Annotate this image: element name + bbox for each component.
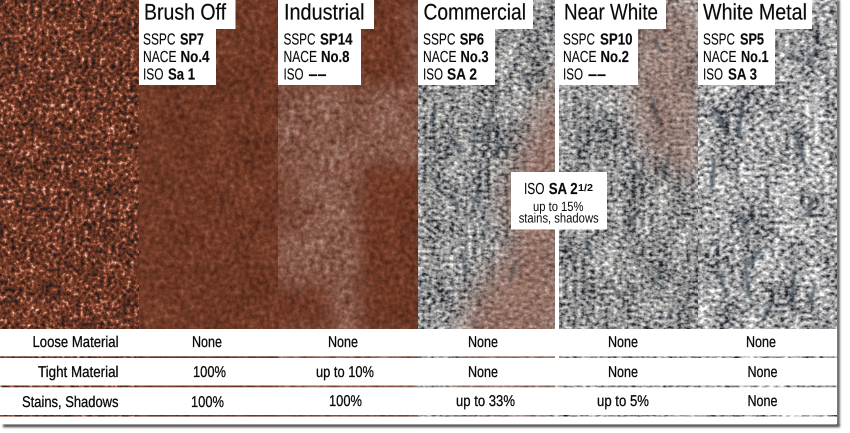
header: White Metal	[698, 0, 812, 85]
row: loose material: None	[192, 334, 222, 351]
row: tight material: up to 10%	[316, 364, 374, 381]
header: White Metal: SP5	[740, 32, 764, 48]
header: White Metal: SSPC	[703, 32, 735, 48]
header: White Metal: No.1	[741, 49, 769, 66]
row: stains, shadows: 100%	[329, 393, 362, 410]
header: Industrial	[278, 0, 374, 85]
row: stains, shadows: up to 33%	[456, 393, 515, 410]
header: White Metal: ISO	[703, 66, 723, 84]
header: White Metal: White Metal	[703, 0, 807, 24]
row: tight material: 100%	[193, 364, 226, 381]
header: Brush Off: SP7	[180, 32, 204, 48]
header: Industrial: ISO	[284, 66, 304, 84]
panel: industrial texture	[278, 0, 418, 417]
panel: commercial texture	[418, 0, 555, 417]
row: stains, shadows: None	[748, 393, 778, 410]
row: loose material: None	[468, 334, 498, 351]
header: Commercial: SP6	[460, 32, 484, 48]
header: Brush Off: NACE	[143, 49, 176, 66]
header: Commercial: SA 2	[447, 66, 477, 84]
header: Brush Off: Brush Off	[144, 0, 227, 24]
gap between commercial and near white	[555, 0, 559, 358]
header: Commercial	[418, 0, 533, 85]
callout: ISO SA 2 1/2: 1/2	[578, 183, 593, 194]
header: Brush Off: Sa 1	[168, 66, 195, 84]
row: tight material: None	[608, 364, 638, 381]
row: loose material	[32, 334, 776, 351]
header: Industrial: SSPC	[284, 32, 316, 48]
row: loose material: None	[746, 334, 776, 351]
callout: ISO SA 2 1/2: SA 2	[549, 181, 578, 198]
panel: white metal texture	[698, 0, 837, 417]
row: stains, shadows: 100%	[191, 394, 224, 411]
callout: ISO SA 2 1/2: stains, shadows	[519, 211, 599, 226]
row: stains, shadows	[22, 393, 778, 411]
header: Near White: SSPC	[563, 32, 595, 48]
callout: ISO SA 2 1/2	[511, 172, 607, 230]
row: tight material: None	[468, 364, 498, 381]
header: Near White: Near White	[564, 0, 658, 24]
header: Commercial: SSPC	[423, 32, 456, 48]
header: Industrial: No.8	[321, 49, 350, 66]
row: stains, shadows: Stains, Shadows	[22, 394, 119, 411]
row: loose material: Loose Material	[32, 334, 118, 351]
header: Near White: NACE	[563, 49, 596, 66]
header: Near White: ––	[588, 66, 606, 84]
header: Near White: ISO	[563, 66, 583, 84]
header: Commercial: No.3	[460, 49, 489, 66]
header: White Metal: SA 3	[728, 66, 757, 84]
row: tight material: Tight Material	[38, 364, 118, 381]
header: Brush Off: SSPC	[143, 32, 176, 48]
header: Industrial: SP14	[320, 32, 353, 48]
header: Near White: SP10	[600, 32, 633, 48]
header: Brush Off	[139, 0, 236, 85]
header: White Metal: NACE	[703, 49, 736, 66]
callout: ISO SA 2 1/2: ISO	[524, 181, 544, 198]
row: stains, shadows: up to 5%	[597, 393, 649, 410]
row: tight material: None	[748, 364, 778, 381]
header: Industrial: Industrial	[284, 0, 364, 24]
header: Brush Off: ISO	[143, 66, 164, 84]
header: Near White	[559, 0, 666, 85]
row: loose material: None	[608, 334, 638, 351]
header: Industrial: ––	[308, 66, 327, 84]
panel: original rusted steel	[0, 0, 139, 417]
panel: near white texture	[555, 0, 698, 417]
row: tight material	[38, 364, 778, 381]
header: Commercial: NACE	[423, 49, 456, 66]
header: Brush Off: No.4	[180, 49, 210, 66]
callout: ISO SA 2 1/2: up to 15%	[533, 199, 584, 214]
header: Near White: No.2	[600, 49, 629, 66]
header: Industrial: NACE	[284, 49, 317, 66]
comparison table	[0, 329, 837, 424]
header: Commercial: Commercial	[424, 0, 526, 24]
panel: brush off texture	[139, 0, 278, 417]
header: Commercial: ISO	[423, 66, 443, 84]
row: loose material: None	[328, 334, 358, 351]
